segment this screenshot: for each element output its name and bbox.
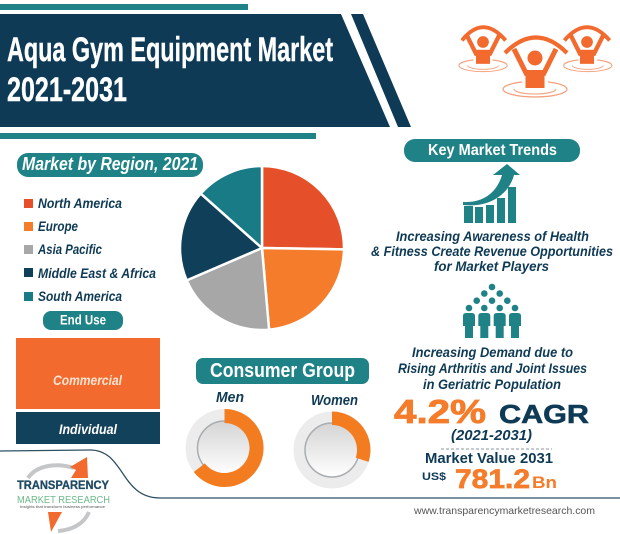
website url: www.transparencymarketresearch.com xyxy=(413,505,595,517)
pill: Key Market Trends heading: Key Market Trends xyxy=(428,142,557,159)
stat: CAGR: 4.2% xyxy=(394,393,486,430)
title: 2021-2031 xyxy=(7,71,127,109)
pill: Consumer Group heading: Consumer Group xyxy=(210,360,355,382)
stat: CAGR: (2021-2031) xyxy=(451,427,532,444)
legend: regions: North America xyxy=(38,195,122,211)
donut: Men share xyxy=(186,409,264,487)
pill: End Use heading: End Use xyxy=(60,312,106,328)
stat: CAGR xyxy=(394,393,589,444)
legend: regions: South America xyxy=(38,288,122,304)
legend: regions xyxy=(24,195,156,304)
pill: Key Market Trends heading xyxy=(404,139,580,162)
text: trend 2: Rising Arthritis and Joint Issues xyxy=(398,360,587,376)
label: Men: Men xyxy=(216,389,244,406)
lower teal bar xyxy=(0,133,316,139)
text: trend 2: in Geriatric Population xyxy=(423,376,561,392)
title xyxy=(7,31,333,109)
icon: group of people xyxy=(463,284,521,338)
pill: Market by Region heading: Market by Region, 2021 xyxy=(22,154,198,174)
pie chart: market by region xyxy=(180,166,344,330)
footer curve line xyxy=(0,450,620,498)
pill: End Use heading xyxy=(43,311,123,330)
legend: regions: Asia Pacific xyxy=(37,241,102,257)
donut: Women share xyxy=(294,412,370,488)
top teal bar xyxy=(0,4,248,10)
logo: Transparency Market Research: MARKET RESEARCH xyxy=(17,494,110,506)
stat: market value: US$ xyxy=(422,471,446,483)
text: trend 1 xyxy=(371,228,613,274)
end use block: Commercial xyxy=(16,338,160,409)
stat: market value: Bn xyxy=(532,473,557,492)
header banner xyxy=(0,14,411,127)
logo: Transparency Market Research: Insights that transform business performance xyxy=(20,505,105,509)
text: trend 2: Increasing Demand due to xyxy=(412,344,573,360)
legend: regions: Middle East & Africa xyxy=(38,265,156,281)
icon: swimmers in water xyxy=(459,27,612,97)
text: trend 1: Increasing Awareness of Health xyxy=(396,228,589,244)
end use block: Commercial: Commercial xyxy=(53,372,123,388)
logo: Transparency Market Research: TRANSPARENCY xyxy=(17,480,109,492)
end use block: Individual xyxy=(16,412,160,444)
text: trend 2 xyxy=(398,344,587,392)
text: trend 1: for Market Players xyxy=(434,258,549,274)
stat: market value xyxy=(422,451,557,494)
label: Women: Women xyxy=(311,392,358,409)
stat: market value: 781.2 xyxy=(455,464,530,494)
stat: market value: Market Value 2031 xyxy=(425,451,553,467)
stat: CAGR: CAGR xyxy=(499,399,589,429)
legend: regions: Europe xyxy=(38,218,78,234)
end use block: Individual: Individual xyxy=(59,421,118,437)
logo: Transparency Market Research xyxy=(17,457,110,532)
title: Aqua Gym Equipment Market xyxy=(7,31,333,69)
icon: rising bar chart with arrow xyxy=(463,164,520,223)
